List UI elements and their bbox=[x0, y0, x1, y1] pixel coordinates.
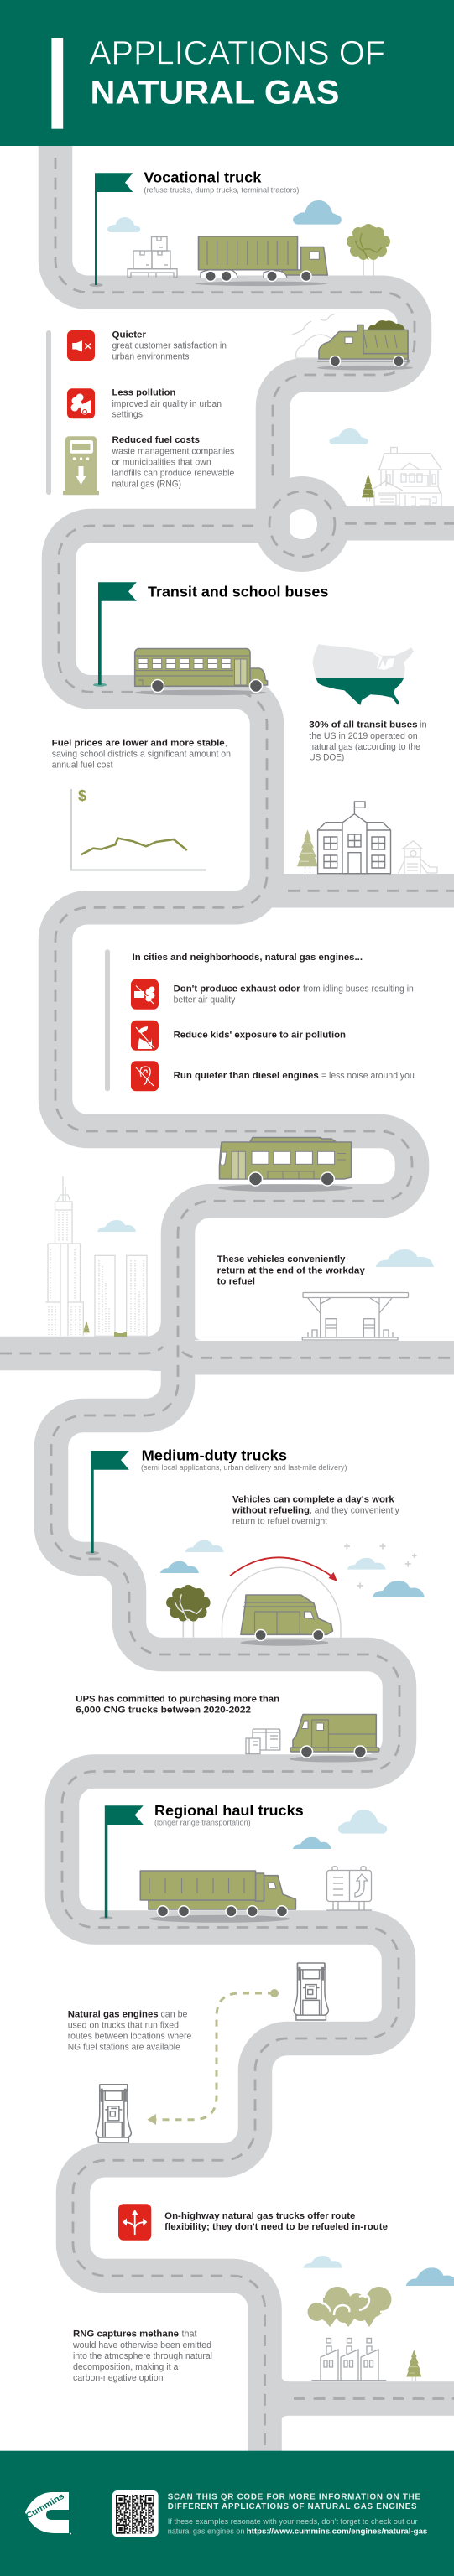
text: quieter: urban environments bbox=[112, 352, 190, 362]
house bbox=[372, 448, 441, 506]
Cummins logo: Cummins bbox=[24, 2491, 66, 2521]
icon: no noise ear bbox=[131, 1061, 159, 1091]
title: NATURAL GAS bbox=[91, 74, 340, 111]
text: kids exposure: Reduce kids' exposure to air pollution bbox=[174, 1030, 346, 1040]
icon: route flexibility bbox=[118, 2204, 151, 2241]
text: vehicles return: return at the end of the workday bbox=[217, 1265, 365, 1275]
text: natural gas engines: Natural gas engines bbox=[68, 2009, 159, 2019]
text: exhaust odor bbox=[174, 984, 414, 1005]
birds and outlined cloud bbox=[292, 314, 336, 358]
text: day's work: , and they conveniently bbox=[310, 1506, 400, 1516]
text: exhaust odor: Don't produce exhaust odor bbox=[174, 984, 300, 994]
text: 30 percent of transit buses: in bbox=[420, 720, 427, 730]
cloud bbox=[329, 428, 368, 444]
cloud bbox=[406, 2267, 454, 2286]
city skyline bbox=[45, 1176, 147, 1336]
cloud bbox=[376, 1249, 434, 1267]
footer call to action: DIFFERENT APPLICATIONS OF NATURAL GAS ENGINES bbox=[168, 2502, 417, 2511]
cloud bbox=[293, 1837, 331, 1849]
sidebar rule bbox=[105, 949, 110, 1091]
text: quieter: great customer satisfaction in bbox=[112, 341, 227, 351]
text: less pollution: settings bbox=[112, 410, 143, 420]
gas station bbox=[302, 1293, 408, 1340]
text: 30 percent of transit buses: natural gas (according to the bbox=[309, 742, 420, 752]
icon: stacked boxes on pallet bbox=[128, 236, 177, 278]
text: vehicles return: to refuel bbox=[217, 1276, 255, 1286]
icon: less pollution bbox=[67, 388, 95, 418]
icon: fuel dispenser bbox=[96, 2085, 131, 2142]
text: route flexibility: flexibility; they don't need to be refueled in-route bbox=[164, 2222, 388, 2232]
text: 30 percent of transit buses: the US in 2019 operated on bbox=[309, 731, 418, 741]
factory bbox=[311, 2338, 386, 2381]
footer call to action: https://www.cummins.com/engines/natural-gas bbox=[247, 2527, 427, 2536]
pine tree bbox=[297, 829, 318, 873]
dotted route arrow bbox=[148, 1989, 279, 2125]
text: day's work: return to refuel overnight bbox=[232, 1517, 327, 1527]
footer call to action: natural gas engines on bbox=[168, 2527, 244, 2536]
header banner bbox=[0, 0, 454, 146]
flag: regional haul trucks bbox=[99, 1805, 144, 1919]
line chart: fuel price bbox=[71, 787, 206, 870]
text: route flexibility bbox=[164, 2211, 388, 2232]
text: natural gas engines bbox=[68, 2009, 191, 2052]
icon: kids exposure bbox=[131, 1021, 159, 1051]
tree bbox=[166, 1585, 211, 1638]
text: reduced fuel costs: landfills can produce renewable bbox=[112, 468, 234, 478]
text: 30 percent of transit buses bbox=[309, 720, 427, 763]
text: quieter than diesel: = less noise around you bbox=[321, 1071, 415, 1081]
text: natural gas engines: can be bbox=[161, 2009, 187, 2019]
text: RNG captures methane: into the atmosphere through natural bbox=[73, 2351, 212, 2361]
heading: regional haul trucks bbox=[154, 1802, 304, 1826]
heading: transit and school buses: Transit and school buses bbox=[148, 583, 329, 600]
heading: regional haul trucks: Regional haul trucks bbox=[154, 1802, 304, 1819]
dump truck bbox=[317, 320, 413, 371]
cloud bbox=[97, 1220, 136, 1232]
smoke cloud bbox=[307, 2287, 393, 2327]
text: quieter than diesel bbox=[174, 1071, 415, 1081]
icon: no exhaust bbox=[131, 979, 159, 1010]
text: 30 percent of transit buses: 30% of all transit buses bbox=[309, 720, 418, 730]
text: RNG captures methane: decomposition, making it a bbox=[73, 2362, 178, 2372]
cloud bbox=[107, 217, 140, 232]
cloud bbox=[160, 1561, 199, 1573]
delivery van bbox=[241, 1595, 332, 1646]
heading: regional haul trucks: (longer range transportation) bbox=[154, 1818, 251, 1826]
text: UPS commitment: UPS has committed to purchasing more than bbox=[76, 1695, 279, 1705]
pine tree bbox=[362, 475, 374, 501]
footer band bbox=[0, 2451, 454, 2576]
text: reduced fuel costs bbox=[112, 435, 234, 489]
cloud bbox=[373, 1581, 425, 1597]
heading: medium-duty trucks: (semi local applications, urban delivery and last-mile delivery) bbox=[141, 1463, 347, 1472]
pine tree bbox=[83, 1321, 90, 1335]
map: USA 30 percent shaded bbox=[312, 644, 414, 705]
icon: fuel pump bbox=[63, 436, 99, 495]
text: less pollution: Less pollution bbox=[112, 388, 175, 398]
sidebar rule bbox=[46, 330, 51, 495]
text: reduced fuel costs: waste management companies bbox=[112, 446, 234, 456]
bush bbox=[114, 1332, 127, 1337]
cloud bbox=[347, 1558, 386, 1570]
QR code bbox=[112, 2490, 159, 2537]
text: in cities intro: In cities and neighborhoods, natural gas engines... bbox=[133, 953, 363, 963]
flag: medium-duty trucks bbox=[86, 1451, 129, 1555]
line chart: fuel price: $ bbox=[78, 787, 86, 804]
vocational truck bbox=[195, 236, 327, 286]
text: natural gas engines: routes between locations where bbox=[68, 2031, 191, 2041]
text: fuel prices: , bbox=[225, 739, 227, 749]
text: RNG captures methane: that bbox=[181, 2329, 197, 2340]
stars bbox=[344, 1543, 417, 1588]
playground bbox=[398, 841, 437, 874]
text: reduced fuel costs: natural gas (RNG) bbox=[112, 479, 181, 489]
UPS delivery truck bbox=[290, 1714, 379, 1763]
title: APPLICATIONS OF bbox=[89, 35, 385, 72]
icon: quieter bbox=[67, 330, 95, 361]
school building bbox=[318, 802, 391, 874]
text: quieter bbox=[112, 330, 227, 362]
text: UPS commitment: 6,000 CNG trucks between 2020-2022 bbox=[76, 1706, 251, 1716]
text: fuel prices: annual fuel cost bbox=[52, 761, 113, 771]
text: route flexibility: On-highway natural gas trucks offer route bbox=[164, 2211, 355, 2221]
text: 30 percent of transit buses: US DOE) bbox=[309, 753, 344, 763]
text: RNG captures methane bbox=[72, 2329, 212, 2383]
text: vehicles return bbox=[217, 1254, 365, 1286]
text: RNG captures methane: would have otherwise been emitted bbox=[72, 2340, 211, 2350]
text: quieter: Quieter bbox=[112, 330, 147, 340]
transit bus bbox=[218, 1137, 353, 1192]
text: day's work: Vehicles can complete a day's work bbox=[232, 1495, 394, 1505]
Cummins logo bbox=[24, 2491, 71, 2534]
text: reduced fuel costs: or municipalities that own bbox=[112, 457, 211, 467]
tree bbox=[347, 224, 390, 276]
text: RNG captures methane: carbon-negative option bbox=[73, 2373, 164, 2383]
cloud bbox=[338, 1810, 387, 1834]
white title bar bbox=[51, 38, 63, 129]
text: day's work bbox=[232, 1495, 400, 1527]
pine tree bbox=[406, 2350, 421, 2381]
text: natural gas engines: NG fuel stations are available bbox=[68, 2042, 180, 2052]
icon: fuel dispenser bbox=[294, 1963, 328, 2020]
text: RNG captures methane: RNG captures methane bbox=[73, 2329, 179, 2340]
heading: vocational truck: (refuse trucks, dump trucks, terminal tractors) bbox=[144, 185, 299, 194]
text: quieter than diesel: Run quieter than diesel engines bbox=[174, 1071, 319, 1081]
road sign bbox=[326, 1867, 372, 1910]
heading: medium-duty trucks bbox=[141, 1446, 347, 1472]
heading: medium-duty trucks: Medium-duty trucks bbox=[142, 1446, 287, 1463]
text: natural gas engines: used on trucks that run fixed bbox=[68, 2020, 179, 2030]
text: fuel prices: saving school districts a significant amount on bbox=[52, 750, 231, 760]
text: less pollution: improved air quality in urban bbox=[112, 399, 222, 409]
cloud bbox=[293, 200, 342, 225]
text: fuel prices bbox=[52, 739, 231, 771]
footer call to action bbox=[168, 2493, 427, 2536]
text: day's work: without refueling bbox=[232, 1506, 310, 1516]
day and night arc bbox=[222, 1557, 341, 1638]
text: UPS commitment bbox=[76, 1695, 279, 1716]
heading: vocational truck: Vocational truck bbox=[144, 169, 262, 186]
school bus bbox=[134, 649, 268, 695]
flag: vocational truck bbox=[89, 173, 133, 287]
footer call to action: SCAN THIS QR CODE FOR MORE INFORMATION ON THE bbox=[168, 2493, 420, 2502]
heading: vocational truck bbox=[144, 169, 299, 194]
title bbox=[89, 35, 385, 111]
regional haul truck bbox=[140, 1871, 295, 1923]
icon: parcels bbox=[246, 1729, 280, 1754]
text: fuel prices: Fuel prices are lower and more stable bbox=[52, 739, 225, 749]
text: reduced fuel costs: Reduced fuel costs bbox=[112, 435, 200, 445]
text: exhaust odor: from idling buses resulting in bbox=[303, 984, 414, 994]
flag: transit and school buses bbox=[93, 582, 137, 687]
cloud bbox=[303, 2256, 342, 2268]
text: less pollution bbox=[112, 388, 222, 420]
cloud bbox=[185, 1540, 224, 1552]
text: vehicles return: These vehicles conveniently bbox=[217, 1254, 346, 1265]
text: exhaust odor: better air quality bbox=[174, 995, 236, 1005]
footer call to action: If these examples resonate with your needs, don't forget to check out our bbox=[168, 2517, 418, 2527]
